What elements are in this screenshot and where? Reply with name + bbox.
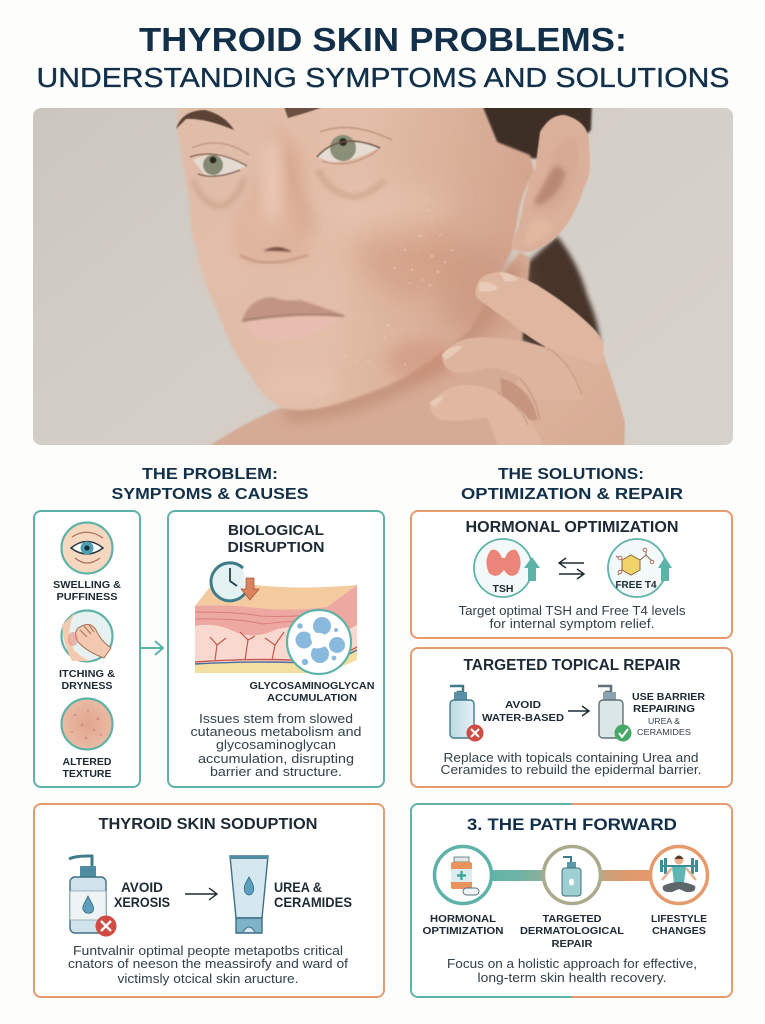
heading: HORMONAL OPTIMIZATION bbox=[466, 519, 678, 536]
connector bbox=[470, 870, 675, 881]
hand bbox=[430, 272, 625, 450]
icon: cream tube bbox=[230, 856, 268, 933]
label: avoid water-based: WATER-BASED bbox=[482, 712, 564, 724]
icon: TSH thyroid: TSH bbox=[492, 583, 514, 595]
arrow bbox=[568, 706, 589, 716]
arrows: exchange bbox=[559, 558, 584, 579]
nose bbox=[236, 134, 306, 260]
heading: the problem: THE PROBLEM: bbox=[142, 466, 278, 483]
label: itching: DRYNESS bbox=[62, 680, 112, 692]
text block bbox=[440, 751, 702, 777]
label: swelling bbox=[53, 579, 121, 603]
text block: victimsly otcical skin aructure. bbox=[118, 972, 298, 986]
text block: glycosaminoglycan bbox=[216, 738, 336, 752]
label: urea and ceramides: CERAMIDES bbox=[274, 894, 352, 910]
heading: the problem bbox=[112, 466, 309, 503]
icon: slowed clock bbox=[211, 563, 259, 601]
heading: the solutions: OPTIMIZATION & REPAIR bbox=[461, 486, 684, 503]
label: lifestyle changes: LIFESTYLE bbox=[651, 913, 707, 925]
icon: avoid bottle bbox=[450, 686, 484, 742]
icon: lifestyle yoga bbox=[650, 846, 708, 904]
icon: TSH thyroid bbox=[474, 539, 540, 597]
heading: DISRUPTION bbox=[228, 539, 324, 556]
icon: scratching hand bbox=[62, 610, 112, 662]
icon: barrier repair bottle bbox=[598, 686, 632, 742]
icon: dermatological bottle bbox=[544, 846, 600, 904]
label: hormonal optimization: OPTIMIZATION bbox=[422, 925, 504, 937]
arrow: symptoms to disruption bbox=[141, 641, 163, 655]
panel: thyroid skin soduption bbox=[34, 804, 384, 997]
label: glycosaminoglycan accumulation: ACCUMULATION bbox=[267, 692, 357, 704]
heading: the solutions bbox=[461, 466, 684, 503]
panel: targeted topical repair bbox=[411, 648, 732, 787]
text block: Ceramides to rebuild the epidermal barrier. bbox=[440, 763, 702, 777]
arrow bbox=[185, 888, 217, 900]
text block: long-term skin health recovery. bbox=[478, 971, 666, 985]
label: targeted dermatological repair: DERMATOLOGICAL bbox=[520, 925, 625, 937]
label: use barrier repairing bbox=[632, 691, 705, 737]
label: use barrier repairing: CERAMIDES bbox=[637, 727, 691, 737]
label: glycosaminoglycan accumulation bbox=[250, 680, 374, 704]
heading: BIOLOGICAL bbox=[228, 522, 324, 539]
heading: TARGETED TOPICAL REPAIR bbox=[464, 657, 680, 674]
text block: cnators of neeson the meassirofy and ward of bbox=[68, 957, 349, 971]
label: targeted dermatological repair: REPAIR bbox=[552, 938, 593, 950]
heading: THYROID SKIN SODUPTION bbox=[98, 816, 318, 833]
panel: the path forward bbox=[411, 804, 732, 997]
label: use barrier repairing: UREA & bbox=[648, 716, 680, 726]
label: texture: ALTERED bbox=[62, 756, 112, 768]
label: swelling: PUFFINESS bbox=[56, 591, 118, 603]
icon: xerosis bottle bbox=[69, 856, 116, 936]
label: targeted dermatological repair: TARGETED bbox=[542, 913, 602, 925]
label: hormonal optimization: HORMONAL bbox=[430, 913, 497, 925]
label: avoid xerosis: XEROSIS bbox=[114, 894, 170, 910]
ear bbox=[512, 115, 590, 252]
text block: Replace with topicals containing Urea and bbox=[444, 751, 699, 765]
icon: hormonal medication bbox=[434, 846, 492, 904]
text block bbox=[190, 712, 362, 779]
label: targeted dermatological repair bbox=[520, 913, 625, 950]
icon: free T4 molecule bbox=[608, 539, 672, 597]
heading bbox=[228, 522, 324, 556]
scaly patches bbox=[319, 199, 453, 395]
text block: Focus on a holistic approach for effective, bbox=[447, 957, 697, 971]
label: avoid xerosis: AVOID bbox=[121, 879, 163, 895]
text block bbox=[447, 957, 697, 985]
label: texture bbox=[62, 756, 112, 780]
photo: woman with dry textured facial skin bbox=[33, 100, 733, 450]
label: avoid xerosis bbox=[114, 879, 170, 910]
text block bbox=[68, 944, 349, 986]
skin cross-section diagram bbox=[195, 563, 357, 674]
text block: Target optimal TSH and Free T4 levels bbox=[458, 604, 686, 618]
label: lifestyle changes: CHANGES bbox=[652, 925, 706, 937]
panel: symptoms bbox=[34, 511, 140, 787]
label: texture: TEXTURE bbox=[62, 768, 112, 780]
text block: accumulation, disrupting bbox=[198, 752, 354, 766]
label: avoid water-based bbox=[482, 699, 564, 724]
label: glycosaminoglycan accumulation: GLYCOSAMINOGLYCAN bbox=[250, 680, 374, 692]
title: UNDERSTANDING SYMPTOMS AND SOLUTIONS bbox=[36, 62, 730, 93]
icon: puffy eye bbox=[62, 522, 112, 574]
text block: for internal symptom relief. bbox=[490, 617, 654, 631]
panel: hormonal optimization bbox=[411, 511, 732, 638]
text block: cutaneous metabolism and bbox=[190, 725, 362, 739]
label: hormonal optimization bbox=[422, 913, 504, 937]
label: itching bbox=[59, 668, 115, 692]
label: urea and ceramides bbox=[274, 879, 352, 910]
label: avoid water-based: AVOID bbox=[505, 699, 541, 711]
text block: Issues stem from slowed bbox=[199, 712, 353, 726]
heading: the problem: SYMPTOMS & CAUSES bbox=[112, 486, 309, 503]
title bbox=[36, 21, 730, 93]
label: use barrier repairing: USE BARRIER bbox=[632, 691, 705, 703]
text block bbox=[458, 604, 686, 631]
panel: biological disruption bbox=[168, 511, 384, 787]
right eye bbox=[317, 128, 392, 164]
heading: the solutions: THE SOLUTIONS: bbox=[498, 466, 644, 483]
icon: altered texture bbox=[62, 698, 112, 750]
title: THYROID SKIN PROBLEMS: bbox=[139, 21, 627, 58]
label: swelling: SWELLING & bbox=[53, 579, 121, 591]
icon: free T4 molecule: FREE T4 bbox=[615, 580, 657, 591]
brows bbox=[176, 110, 234, 130]
lips bbox=[241, 296, 345, 323]
label: use barrier repairing: REPAIRING bbox=[633, 703, 695, 715]
heading: 3. THE PATH FORWARD bbox=[467, 815, 677, 834]
text block: Funtvalnir optimal peopte metapotbs critical bbox=[73, 944, 343, 958]
text block: barrier and structure. bbox=[210, 765, 342, 779]
label: lifestyle changes bbox=[651, 913, 707, 937]
label: itching: ITCHING & bbox=[59, 668, 115, 680]
label: urea and ceramides: UREA & bbox=[274, 879, 322, 895]
left eye bbox=[190, 143, 249, 176]
icon: glycosaminoglycan molecule bbox=[287, 610, 351, 674]
